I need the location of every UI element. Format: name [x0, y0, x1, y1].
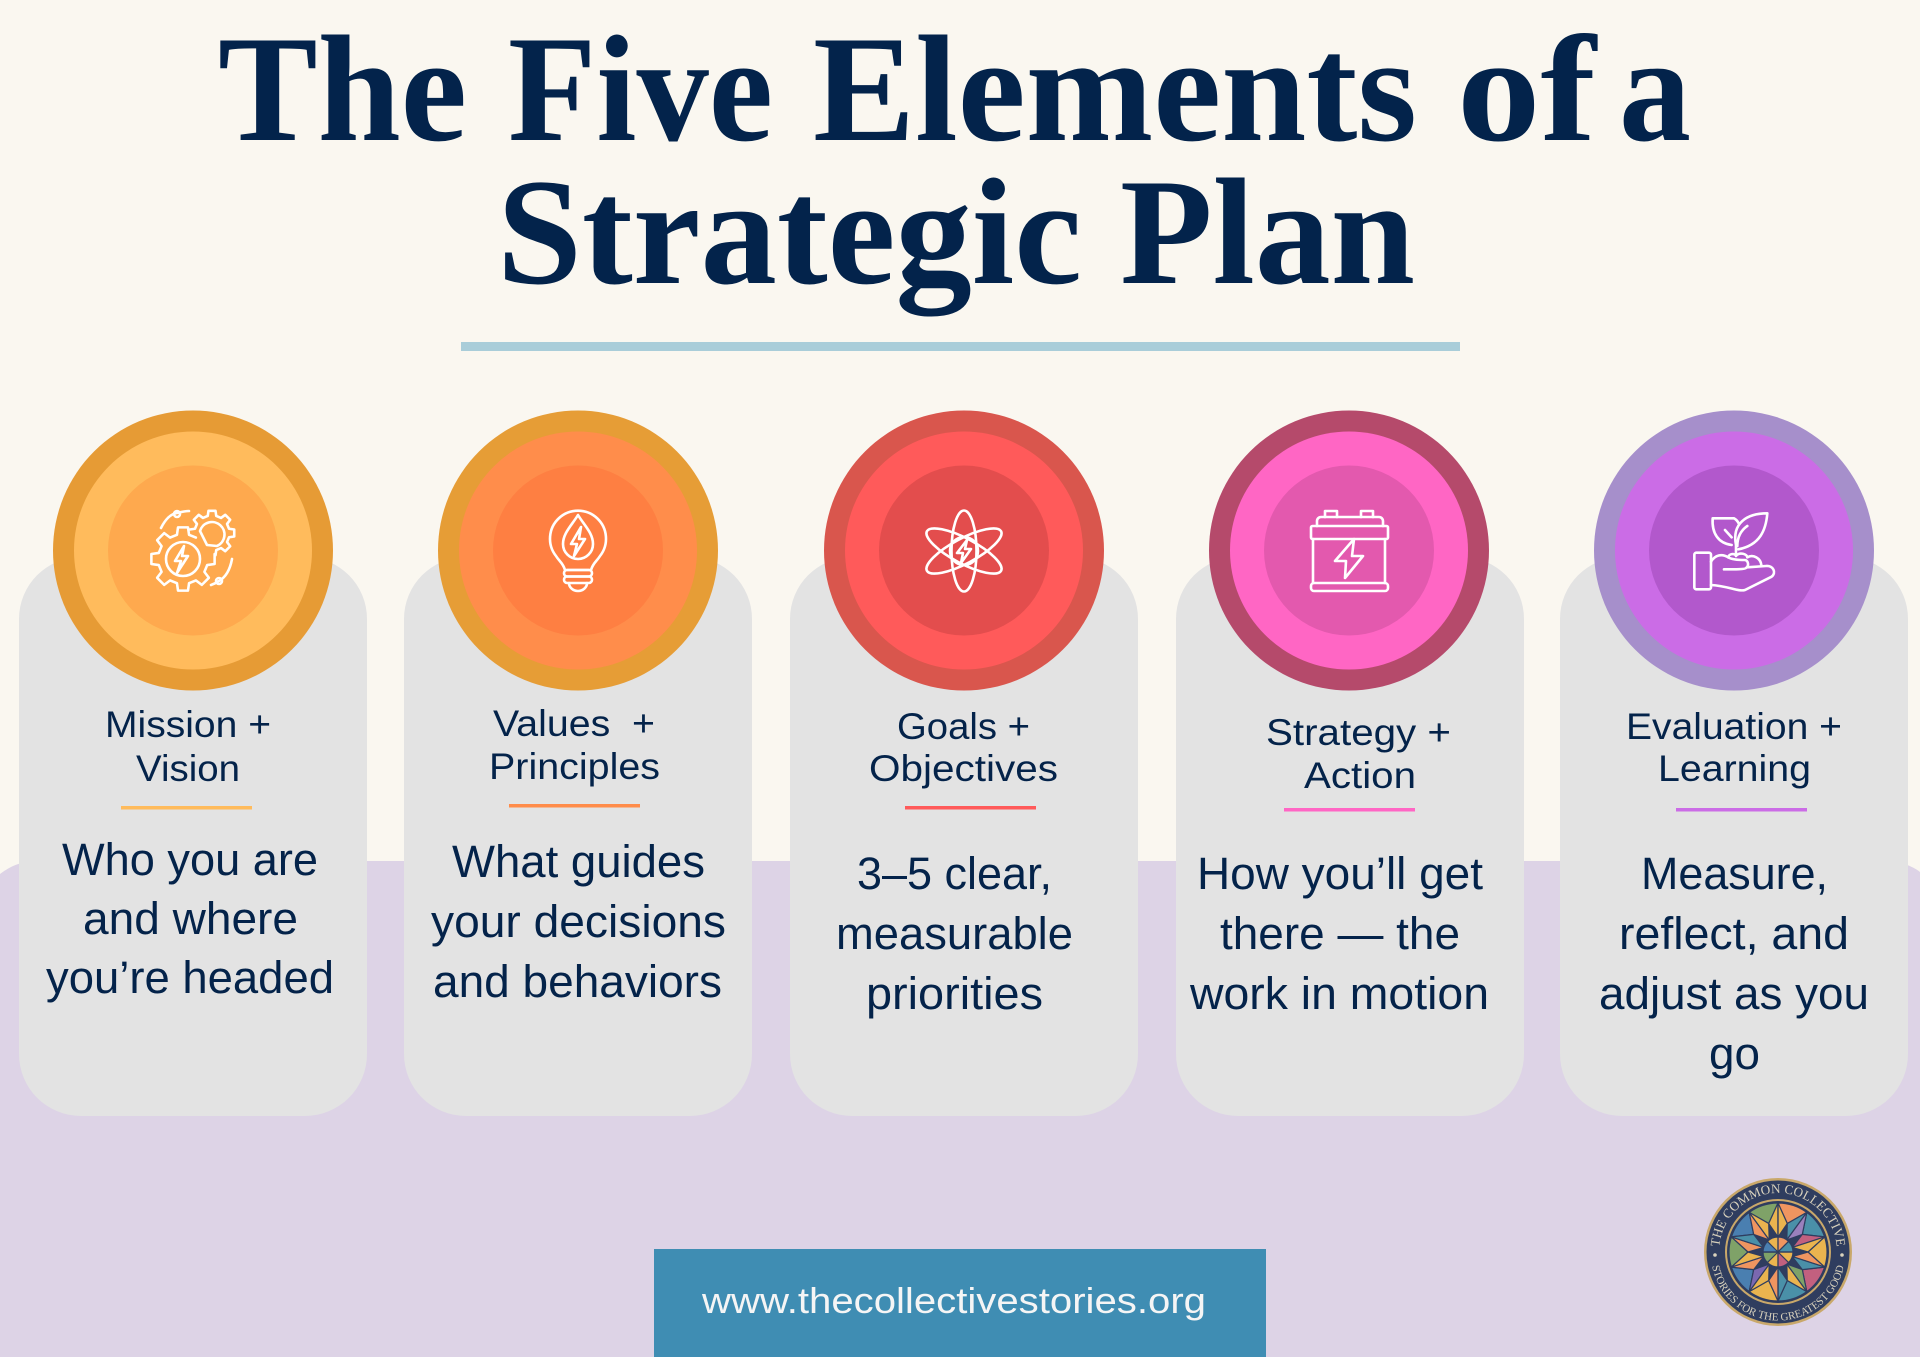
description: reflect, and — [1619, 908, 1849, 959]
panel: mission and vision — [19, 410, 367, 1116]
description: Measure, — [1641, 848, 1828, 899]
heading rule — [1676, 808, 1807, 812]
card background — [404, 557, 752, 1116]
title: The — [218, 5, 467, 173]
card background — [1560, 557, 1908, 1116]
title: Five — [508, 5, 773, 173]
logo: The Common Collective seal: THE COMMON COLLECTIVE — [1710, 1184, 1846, 1246]
icon badge: light bulb — [438, 410, 718, 690]
card background — [790, 557, 1138, 1116]
heading: Vision — [136, 748, 240, 789]
title: of — [1457, 5, 1599, 173]
icon badge: atom — [824, 410, 1104, 690]
description: How you’ll get — [1197, 848, 1483, 899]
heading: Values + — [493, 703, 655, 744]
description: your decisions — [431, 896, 726, 947]
heading — [489, 703, 660, 787]
heading rule — [121, 806, 252, 810]
description: go — [1709, 1028, 1760, 1079]
heading — [105, 704, 271, 789]
heading: Action — [1304, 755, 1416, 796]
heading: Strategy + — [1266, 712, 1451, 753]
icon badge: gears — [53, 410, 333, 690]
heading — [1626, 706, 1842, 789]
title: Elements — [813, 5, 1417, 173]
footer website banner — [654, 1249, 1266, 1357]
logo: The Common Collective seal — [1704, 1178, 1852, 1326]
heading — [869, 706, 1058, 789]
card background — [1176, 557, 1524, 1116]
description: priorities — [866, 968, 1043, 1019]
title: Plan — [1120, 148, 1415, 316]
description: 3–5 clear, — [857, 848, 1052, 899]
lavender lower band — [0, 861, 1920, 1357]
description: measurable — [836, 908, 1073, 959]
panel: goals and objectives — [790, 410, 1138, 1116]
panel: strategy and action — [1176, 410, 1524, 1116]
description: What guides — [452, 836, 705, 887]
description — [46, 834, 334, 1003]
icon badge: battery — [1209, 410, 1489, 690]
description: there — the — [1220, 908, 1460, 959]
title — [218, 5, 1691, 317]
title underline — [461, 342, 1460, 351]
heading rule — [1284, 808, 1415, 812]
panel: values and principles — [404, 410, 752, 1116]
logo: The Common Collective seal: STORIES FOR THE GREATEST GOOD — [1712, 1266, 1844, 1320]
heading: Goals + — [897, 706, 1030, 747]
description: adjust as you — [1599, 968, 1869, 1019]
title: a — [1619, 5, 1691, 173]
description — [431, 836, 726, 1007]
description: and where — [83, 893, 298, 944]
heading rule — [905, 806, 1036, 810]
heading: Objectives — [869, 748, 1058, 789]
title: Strategic — [497, 148, 1082, 317]
icon badge: hand with plant — [1594, 410, 1874, 690]
description — [1189, 848, 1489, 1019]
heading: Learning — [1658, 748, 1811, 789]
heading: Principles — [489, 746, 660, 787]
description: work in motion — [1189, 968, 1489, 1019]
card background — [19, 557, 367, 1116]
heading rule — [509, 804, 640, 808]
description: you’re headed — [46, 952, 334, 1003]
heading: Evaluation + — [1626, 706, 1842, 747]
heading: Mission + — [105, 704, 271, 745]
panel: evaluation and learning — [1560, 410, 1908, 1116]
description: and behaviors — [433, 956, 722, 1007]
heading — [1266, 712, 1451, 796]
footer website banner: www.thecollectivestories.org — [701, 1280, 1206, 1321]
description — [836, 848, 1073, 1019]
description — [1599, 848, 1869, 1079]
description: Who you are — [62, 834, 318, 885]
